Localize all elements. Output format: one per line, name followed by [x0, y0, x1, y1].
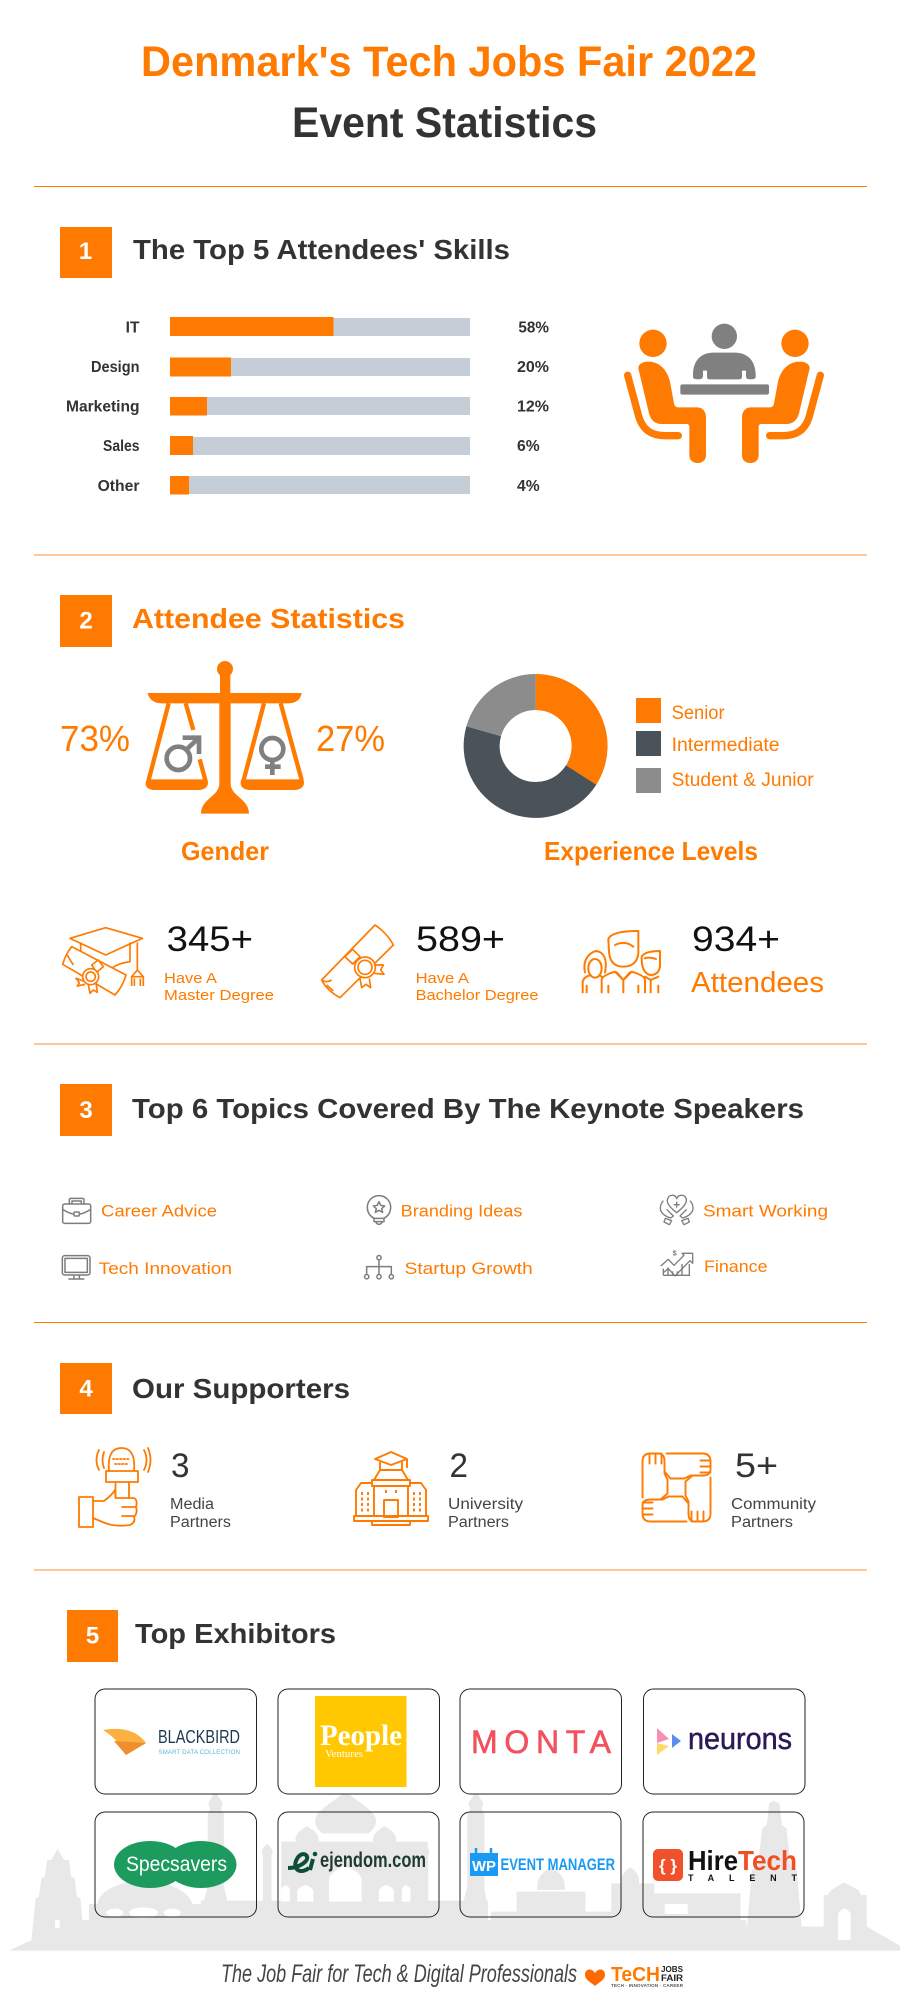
logo card: Specsavers: Specsavers [126, 1853, 227, 1876]
stat: media partners: Media [170, 1496, 214, 1513]
icon: caring hands with heart [660, 1195, 693, 1225]
logo card: WP Event Manager: WP [472, 1858, 496, 1875]
logo card: Neurons [644, 1689, 805, 1794]
topic: branding ideas: Branding Ideas [401, 1202, 522, 1220]
stat: attendees: Attendees [691, 967, 824, 999]
stat: master degree [164, 920, 274, 1004]
experience levels label: Experience Levels [544, 836, 758, 866]
topic: career advice: Career Advice [101, 1202, 217, 1220]
topic: startup growth: Startup Growth [405, 1259, 533, 1278]
panel: keynote topics [60, 1084, 828, 1279]
gender stat male: 73% [60, 718, 130, 759]
stat: community partners: Community [731, 1496, 816, 1513]
stat: university partners: University [448, 1496, 523, 1513]
logo card: Monta [460, 1689, 622, 1794]
logo: Tech Jobs Fair: TECH · INNOVATION · CAREER [611, 1983, 684, 1988]
logo card: People Ventures [278, 1689, 440, 1794]
stat: university partners [448, 1447, 523, 1531]
stat: bachelor degree: 589+ [416, 920, 505, 959]
topic: finance: Finance [704, 1257, 768, 1276]
bar chart: skills: IT [126, 320, 140, 336]
icon: computer monitor [62, 1256, 90, 1279]
heading: our supporters: Our Supporters [132, 1373, 350, 1404]
logo: Tech Jobs Fair [611, 1964, 684, 1988]
section number 2 [60, 595, 112, 647]
bar chart: skills: Other [98, 478, 140, 495]
icon: org tree [364, 1255, 393, 1279]
panel: attendee statistics [60, 595, 824, 1004]
gender stat female: 27% [316, 718, 385, 759]
stat: master degree: 345+ [167, 920, 253, 959]
logo card: People Ventures: People [320, 1719, 402, 1752]
section number 5 [67, 1610, 118, 1662]
icon: light bulb [367, 1196, 391, 1224]
chart legend: Student & Junior [672, 770, 814, 791]
section number 1 [60, 227, 112, 278]
stat: attendees: 934+ [692, 920, 780, 959]
section number 1: 1 [79, 238, 92, 265]
title: Denmark's Tech Jobs Fair 2022 [141, 38, 757, 86]
stat: bachelor degree: Have A [416, 970, 469, 987]
section number 4: 4 [79, 1376, 93, 1402]
icon: attendees group [583, 931, 660, 992]
bar chart: skills: 4% [517, 478, 540, 495]
bar chart: skills [66, 317, 549, 495]
heading: attendee statistics: Attendee Statistics [132, 603, 405, 634]
icon: finance chart [661, 1249, 693, 1276]
gender label: Gender [181, 836, 269, 866]
section number 3 [60, 1084, 112, 1136]
logo card: Blackbird: SMART DATA COLLECTION [158, 1750, 240, 1756]
icon: interlocked hands [642, 1454, 710, 1522]
logo card: HireTech Talent: Tech [738, 1845, 797, 1876]
stat: master degree: Have A [164, 970, 217, 987]
logo: Tech Jobs Fair: TeCH [611, 1964, 660, 1986]
icon: graduation cap and diploma [63, 928, 143, 995]
icon: university building [354, 1452, 428, 1525]
stat: attendees [691, 920, 824, 999]
stat: bachelor degree [416, 920, 538, 1004]
stat: media partners: Partners [170, 1514, 231, 1531]
stat: community partners: Partners [731, 1514, 793, 1531]
logo card: Blackbird [95, 1689, 256, 1794]
logo card: Specsavers [95, 1812, 256, 1917]
bar chart: skills: 12% [517, 398, 549, 415]
section number 3: 3 [79, 1097, 93, 1124]
chart legend: Intermediate [672, 735, 780, 756]
section number 4 [60, 1363, 112, 1414]
heading: keynote topics: Top 6 Topics Covered By The Keynote Speakers [132, 1093, 804, 1124]
panel: supporters [60, 1363, 816, 1531]
icon: people meeting at a table [628, 324, 820, 463]
logo card: HireTech Talent: { } [659, 1856, 677, 1875]
logo card: Monta: MONTA [471, 1724, 612, 1760]
heading: top exhibitors: Top Exhibitors [135, 1618, 336, 1649]
logo card: Neurons: neurons [688, 1721, 792, 1756]
logo: Tech Jobs Fair: JOBS [661, 1965, 684, 1974]
logo card: Ejendom [278, 1812, 439, 1917]
bar chart: skills: 58% [518, 320, 549, 336]
icon: diploma scroll [322, 925, 393, 998]
logo card: HireTech Talent: TALENT [688, 1873, 798, 1883]
stat: university partners: Partners [448, 1514, 509, 1531]
title [141, 38, 757, 147]
bar chart: skills: 6% [517, 438, 540, 455]
panel: top 5 attendee skills [60, 227, 820, 495]
footer tagline: The Job Fair for Tech & Digital Professionals [221, 1960, 577, 1988]
section number 2: 2 [79, 608, 93, 634]
panel: top exhibitors [67, 1610, 805, 1917]
section number 5: 5 [86, 1622, 99, 1650]
background skyline [9, 1788, 900, 1951]
chart legend [636, 698, 814, 793]
stat: university partners: 2 [450, 1447, 468, 1485]
footer [221, 1960, 684, 1988]
title: Event Statistics [292, 99, 597, 147]
logo card: HireTech Talent [643, 1812, 804, 1917]
topic: tech innovation: Tech Innovation [99, 1259, 232, 1278]
logo card: HireTech Talent: Hire [688, 1845, 738, 1876]
icon: microphone in hand [79, 1448, 150, 1527]
donut chart: experience levels [464, 674, 608, 818]
logo card: People Ventures: Ventures [325, 1748, 363, 1760]
icon: finance chart: $ [673, 1249, 677, 1258]
chart legend: Senior [672, 703, 725, 724]
stat: media partners [170, 1447, 231, 1531]
stat: community partners: 5+ [735, 1447, 778, 1485]
bar chart: skills: Marketing [66, 398, 140, 415]
stat: master degree: Master Degree [164, 987, 274, 1004]
bar chart: skills: Sales [103, 438, 140, 455]
stat: bachelor degree: Bachelor Degree [416, 987, 538, 1004]
heading: top 5 skills: The Top 5 Attendees' Skills [133, 234, 510, 265]
icon: briefcase [63, 1198, 91, 1223]
bar chart: skills: Design [91, 359, 140, 376]
logo card: Blackbird: BLACKBIRD [158, 1727, 240, 1747]
stat: community partners [731, 1447, 816, 1531]
logo card: WP Event Manager [460, 1812, 621, 1917]
icon: heart [585, 1969, 605, 1986]
topic: smart working: Smart Working [703, 1202, 828, 1220]
logo card: Ejendom: ejendom.com [320, 1849, 426, 1872]
bar chart: skills: 20% [517, 359, 549, 376]
icon: balance scale [146, 661, 304, 814]
logo: Tech Jobs Fair: FAIR [661, 1973, 683, 1984]
logo card: WP Event Manager: EVENT MANAGER [500, 1855, 615, 1874]
stat: media partners: 3 [171, 1447, 190, 1485]
